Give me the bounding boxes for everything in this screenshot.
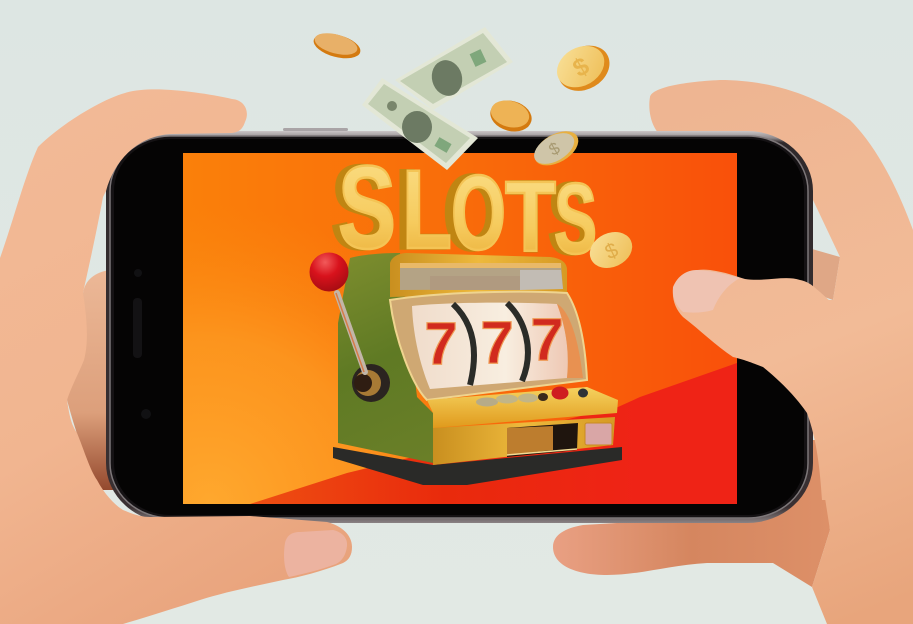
- title extrusion: L: [395, 147, 448, 272]
- coin top right: [549, 36, 618, 100]
- title front face: S: [554, 163, 597, 275]
- heading: SLOTS: [331, 142, 597, 275]
- sevens: 7: [480, 309, 514, 376]
- machine buttons: [476, 386, 588, 406]
- machine gold top frame: [390, 253, 567, 297]
- reels: [412, 303, 583, 389]
- phone: [106, 128, 813, 523]
- flying money and coins: [311, 27, 618, 172]
- side button: [283, 128, 348, 131]
- sevens: 7: [424, 310, 458, 377]
- right hand lower finger: [553, 440, 830, 587]
- floor glow orange: [183, 204, 583, 504]
- title extrusion: S: [331, 142, 391, 274]
- reel separator 1: [453, 304, 474, 385]
- sevens: 7: [530, 306, 564, 373]
- title extrusion: [331, 142, 593, 275]
- reel glass edge right: [557, 304, 583, 378]
- coin beside title: $: [601, 238, 622, 264]
- phone highlight: [110, 136, 808, 518]
- right thumb nail: [673, 270, 740, 313]
- coin top left: [311, 29, 363, 63]
- left thumb nail: [284, 530, 347, 577]
- tray lit section: [507, 426, 553, 455]
- machine gold deck: [427, 387, 618, 428]
- banknote lower: [362, 78, 478, 170]
- title front face: L: [402, 147, 452, 272]
- coin silver: [529, 124, 584, 172]
- machine glass housing: [390, 292, 587, 400]
- title extrusion: T: [510, 161, 553, 273]
- left hand with thumbs: [0, 89, 352, 624]
- right hand top finger and palm: [649, 80, 913, 624]
- machine gold front: [433, 417, 615, 465]
- phone bezel: [114, 139, 804, 515]
- front camera and speaker: [133, 269, 151, 419]
- title front face: S: [338, 142, 396, 274]
- title front face: T: [505, 161, 556, 273]
- coin middle: [487, 96, 535, 136]
- coin top right: $: [568, 52, 594, 83]
- title extrusion: S: [548, 163, 593, 275]
- coin beside title: [584, 225, 638, 275]
- machine plate: [585, 423, 612, 445]
- machine base: [333, 447, 622, 485]
- floor red: [250, 363, 737, 504]
- slot machine: [310, 252, 622, 485]
- screen backdrop: [183, 153, 737, 504]
- title front face: [338, 142, 597, 275]
- machine glass top: [400, 263, 563, 290]
- machine lever: [310, 252, 390, 402]
- tray lip: [507, 449, 577, 455]
- finger behind phone left: [67, 270, 114, 490]
- finger behind phone right: [805, 247, 840, 300]
- title front face: O: [451, 154, 506, 272]
- title extrusion: O: [443, 154, 501, 272]
- reel drum: [412, 303, 568, 389]
- sevens: [424, 306, 564, 377]
- phone frame: [106, 131, 813, 523]
- machine green body: [338, 253, 433, 463]
- coin silver: $: [546, 138, 564, 160]
- banknote upper: [395, 27, 513, 110]
- reel separator 2: [507, 303, 528, 381]
- screen: [183, 142, 737, 504]
- machine payout tray: [507, 423, 578, 457]
- right thumb over screen: [673, 270, 913, 500]
